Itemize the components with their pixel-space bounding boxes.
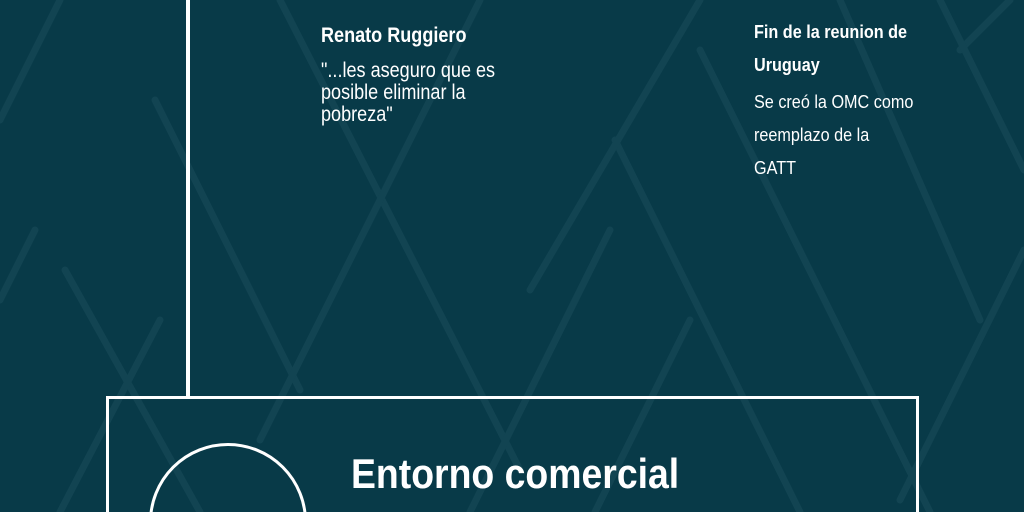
- text block: Fin de la reunion de Uruguay: Fin de la reunion de: [754, 22, 907, 42]
- text block: Renato Ruggiero: Renato Ruggiero: [321, 24, 466, 47]
- text block: Fin de la reunion de Uruguay: [754, 22, 913, 178]
- text block: Fin de la reunion de Uruguay: Uruguay: [754, 55, 820, 75]
- text block: Renato Ruggiero: [321, 24, 495, 126]
- text block: Fin de la reunion de Uruguay: Se creó la OMC como: [754, 92, 913, 112]
- text block: Fin de la reunion de Uruguay: GATT: [754, 158, 796, 178]
- icon circle: [149, 443, 307, 512]
- text block: Fin de la reunion de Uruguay: reemplazo de la: [754, 125, 869, 145]
- text block: Renato Ruggiero: "...les aseguro que es posible eliminar la pobreza": [321, 59, 495, 126]
- heading: Entorno comercial: [351, 450, 679, 497]
- timeline vertical line: [186, 0, 190, 397]
- panel: Entorno comercial: [106, 396, 919, 512]
